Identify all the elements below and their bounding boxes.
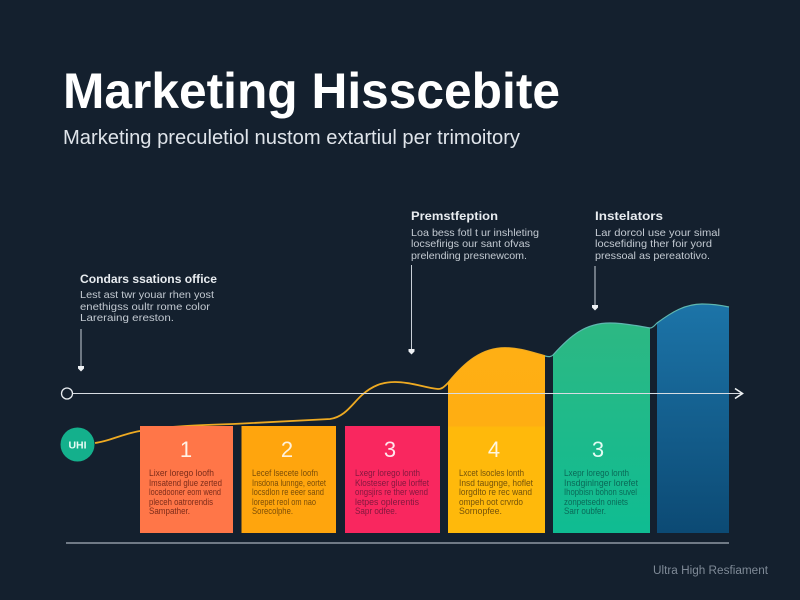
- card 1: [140, 426, 233, 533]
- card 2: 2: [281, 437, 293, 462]
- baseline: [66, 542, 729, 544]
- callout: right annotation: pressoal as pereatotivo.: [595, 250, 710, 262]
- card 5: [553, 323, 650, 533]
- card 3: Sapr odfee.: [355, 506, 397, 516]
- callout: right annotation: Instelators: [595, 209, 663, 223]
- callout: left annotation: Lest ast twr youar rhen yost: [80, 289, 214, 301]
- card 4: Sornopfee.: [459, 506, 502, 516]
- callout: middle annotation: prelending presnewcom.: [411, 250, 527, 262]
- card 5: Lxepr lorego lonth: [564, 468, 629, 478]
- arrow: right annotation pointer: [592, 266, 598, 310]
- card 3: ongsjirs re ther wend: [355, 487, 428, 497]
- card 4: 4: [488, 437, 500, 462]
- subtitle: Marketing preculetiol nustom extartiul per trimoitory: [63, 127, 520, 149]
- start badge: [60, 428, 94, 462]
- card 1: Imsatend glue zerted: [149, 478, 222, 488]
- trend line: green and blue section: [545, 304, 729, 357]
- callout: middle annotation: Premstfeption: [411, 209, 498, 223]
- card 3: Klosteser glue lorffet: [355, 478, 429, 488]
- card 2: lorepet reol om nao: [252, 497, 316, 507]
- callout: middle annotation: [411, 209, 539, 262]
- card 1: Lixer lorego loofh: [149, 468, 214, 478]
- arrow: middle annotation pointer: [408, 265, 414, 354]
- card 5: Insdginlnger lorefet: [564, 478, 638, 488]
- card 4: lorgdlto re rec wand: [459, 487, 532, 497]
- card 2: Sorecolphe.: [252, 506, 293, 516]
- title: Marketing Hisscebite: [63, 63, 560, 119]
- card 3: Lxegr lorego lonth: [355, 468, 420, 478]
- callout: right annotation: Lar dorcol use your simal: [595, 227, 720, 239]
- callout: middle annotation: locsefirigs our sant ofvas: [411, 238, 530, 250]
- card 3: 3: [384, 437, 396, 462]
- card 1: pleceh oatrorendis: [149, 497, 213, 507]
- arrow: left annotation pointer: [78, 329, 84, 372]
- card 4: Insd taugnge, hoflet: [459, 478, 533, 488]
- card 5: Sarr oubfer.: [564, 506, 606, 516]
- card 5: 3: [592, 437, 604, 462]
- card 1: 1: [180, 437, 192, 462]
- callout: middle annotation: Loa bess fotl t ur inshleting: [411, 227, 539, 239]
- callout: left annotation: Lareraing ereston.: [80, 312, 174, 324]
- card 2: locsdlon re eeer sand: [252, 487, 324, 497]
- card 1: locedooner eom wend: [149, 487, 221, 497]
- start badge: UHI: [68, 440, 87, 452]
- callout: left annotation: [80, 272, 217, 324]
- callout: left annotation: enethigss oultr rome color: [80, 301, 211, 313]
- card 3: [345, 426, 440, 533]
- callout: right annotation: [595, 209, 720, 262]
- card 4: ompeh oot crvrdo: [459, 497, 523, 507]
- card 5: zonpetsedn oniets: [564, 497, 628, 507]
- card 2: Lecef lsecete loofn: [252, 468, 318, 478]
- timeline axis with start marker and arrowhead: [62, 388, 742, 399]
- callout: right annotation: locsefiding ther foir yord: [595, 238, 712, 250]
- card 2: [242, 426, 336, 533]
- card 4: [448, 348, 545, 533]
- card 1: Sampather.: [149, 506, 190, 516]
- card 3: letpes oplerentis: [355, 497, 419, 507]
- card 5: Ihopbisn bohon suvel: [564, 487, 637, 497]
- callout: left annotation: Condars ssations office: [80, 272, 217, 286]
- card 4: Lxcet lsocles lonth: [459, 468, 524, 478]
- footer note: Ultra High Resfiament: [653, 565, 769, 577]
- card 6: [657, 304, 729, 533]
- trend line: yellow section: [95, 348, 545, 443]
- card 2: Insdona lunnge, eortet: [252, 478, 326, 488]
